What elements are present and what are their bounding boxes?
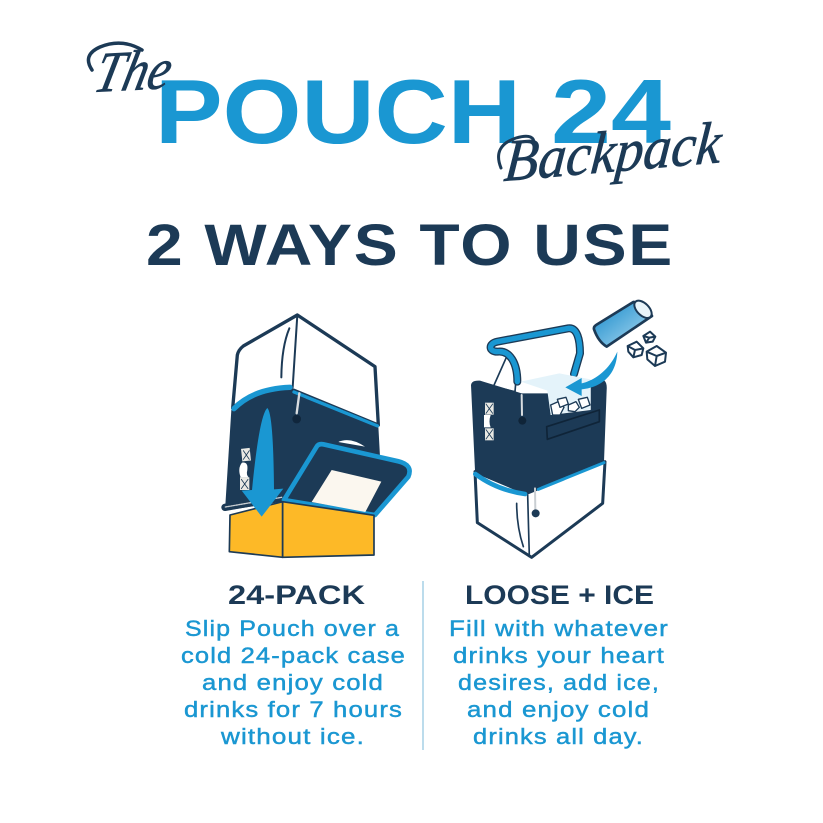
description: 24-pack: cold 24-pack case: [181, 643, 406, 668]
divider: [422, 581, 424, 750]
backpack white top: [233, 315, 378, 425]
flap window: [312, 470, 381, 512]
zipper: [294, 392, 378, 426]
heading: loose + ice: LOOSE + ICE: [465, 580, 654, 610]
description: loose + ice: drinks your heart: [453, 643, 665, 668]
blue trim: [234, 387, 290, 409]
illustration: backpack over 24-pack case: [225, 315, 410, 557]
zipper pulls: [518, 395, 540, 517]
zipper pull: [292, 393, 301, 423]
title word: POUCH 24: [155, 62, 671, 163]
backpack navy body: [225, 388, 380, 513]
description: loose + ice: and enjoy cold: [467, 697, 650, 722]
down arrow: [242, 408, 283, 517]
heading: 24-pack: 24-PACK: [228, 580, 366, 610]
handle: [491, 328, 580, 382]
description: 24-pack: and enjoy cold: [202, 670, 384, 695]
title: The Pouch 24 Backpack: [88, 36, 725, 195]
can: [594, 298, 655, 347]
lower white compartment: [475, 462, 605, 557]
handle blue: [491, 328, 580, 382]
side handle and patches: [239, 448, 251, 490]
zipper: [538, 463, 604, 489]
fold lines: [281, 315, 297, 387]
yellow box: [229, 502, 374, 557]
curved arrow: [565, 352, 617, 396]
title word: POUCH 24: 24: [551, 62, 671, 163]
label block: loose + ice: [449, 580, 669, 749]
description: 24-pack: without ice.: [220, 724, 365, 749]
white lid fold: [493, 357, 517, 392]
script word: Backpack: Backpack: [502, 110, 725, 195]
bottom zipper: [225, 497, 282, 507]
description: 24-pack: [181, 616, 406, 749]
heading: 2 ways to use: 2 WAYS TO USE: [146, 213, 674, 278]
illustration: loose drinks and ice: [471, 298, 666, 557]
inner flap: [284, 444, 410, 515]
script word: The: The: [89, 36, 179, 105]
description: 24-pack: drinks for 7 hours: [184, 697, 403, 722]
ice in bag: [551, 397, 590, 415]
fold lines: [517, 495, 529, 557]
navy body: [471, 380, 607, 493]
side handle and patches: [484, 403, 494, 440]
description: loose + ice: desires, add ice,: [458, 670, 660, 695]
description: loose + ice: [449, 616, 669, 749]
description: 24-pack: Slip Pouch over a: [185, 616, 400, 641]
description: loose + ice: drinks all day.: [473, 724, 644, 749]
ice cubes: [628, 332, 666, 366]
pocket: [547, 410, 599, 439]
title word: POUCH 24: POUCH: [155, 62, 521, 163]
description: loose + ice: Fill with whatever: [449, 616, 669, 641]
interior: [521, 373, 591, 415]
blue trim: [475, 474, 525, 494]
label block: 24-pack: [181, 580, 406, 749]
